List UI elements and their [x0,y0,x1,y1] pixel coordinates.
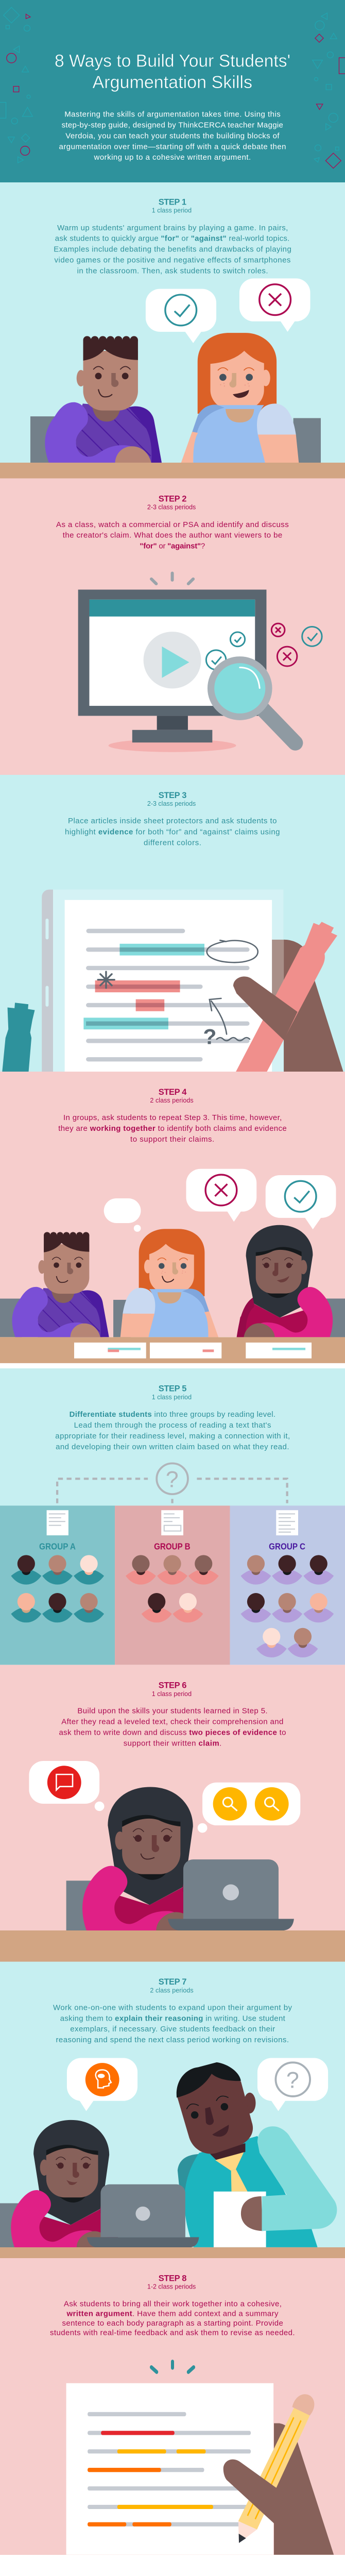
step 5 text [55,1410,290,1451]
speech bubble: cross [186,1169,256,1222]
illustration: student at laptop [29,1761,300,1930]
illustration: three students discussing [0,1169,345,1363]
step 8 text: written argument. Have them add context and a summary [66,2310,279,2318]
panel: step 6 [0,1665,345,1962]
desk [0,1930,345,1962]
step 8 text: Ask students to bring all their work together into a cohesive, [64,2300,282,2309]
teacher [177,2062,337,2247]
step 8 text [50,2300,295,2337]
step 5 duration: 1 class period [152,1394,192,1401]
step 1 text: in the classroom. Then, ask students to switch roles. [77,266,268,275]
step 6 text [59,1706,286,1748]
step 4 text [58,1113,287,1144]
panel: step 4 [0,1072,345,1363]
step 1 text: Warm up students' argument brains by playing a game. In pairs, [57,224,288,232]
illustration: highlighted article in sheet protector: ? [203,1025,216,1048]
step 4 heading: STEP 4 [159,1088,187,1097]
group C panel [230,1505,345,1665]
step 3 text: different colors. [144,838,201,847]
desk with papers [0,1337,345,1363]
step 3 text: highlight evidence for both “for” and “against” claims using [65,827,280,836]
step 6 heading: STEP 6 [159,1681,186,1690]
illustration: teacher and student [0,2058,337,2248]
step 1 heading: STEP 1 [159,198,186,207]
step 7 text: asking them to explain their reasoning in writing. Use student [60,2014,286,2023]
step 7 text: reasoning and spend the next class period working on revisions. [56,2036,289,2044]
question mark with dashed connectors: ? [166,1467,179,1493]
student: boy [30,336,162,463]
step 6 text: After they read a leveled text, check their comprehension and [61,1718,283,1726]
panel: step 1 [0,182,345,478]
panel: step 7 [0,1962,345,2259]
title: 8 Ways to Build Your Students' [55,52,290,71]
step 5 text: appropriate for their readiness level, making a connection with it, [55,1432,290,1440]
illustration: monitor with magnifier [78,573,322,752]
speech bubble: cross [239,278,310,332]
intro text [59,110,286,162]
step 5 heading: STEP 5 [159,1384,186,1394]
thought bubble: claim icon [29,1761,105,1811]
speech bubble: reasoning icon [67,2058,137,2111]
step 1 text: video games or the positive and negative effects of smartphones [55,256,290,265]
step 1 duration: 1 class period [152,207,192,214]
laptop [87,2184,199,2248]
thought bubble: evidence icons [198,1783,300,1833]
desk [0,2247,345,2259]
student in hijab [0,2120,120,2248]
panel: step 2 [0,478,345,775]
student in hijab [66,1787,205,1930]
group B panel: GROUP B [154,1541,191,1551]
step 2 duration: 2-3 class periods [147,503,196,511]
step 7 text [53,2003,292,2044]
step 6 duration: 1 class period [152,1690,192,1698]
group B panel [115,1505,230,1665]
step 4 text: to support their claims. [130,1135,214,1144]
panel: header [0,0,345,182]
step 5 text: and developing their own written claim based on what they read. [56,1443,289,1451]
thought bubble [104,1198,141,1232]
student: girl in hijab [237,1225,345,1337]
step 2 heading: STEP 2 [159,495,186,504]
step 7 heading: STEP 7 [159,1977,186,1987]
step 4 duration: 2 class periods [150,1097,194,1104]
step 3 text [65,817,280,847]
intro text: argumentation over time—starting off with a quick debate then [59,143,286,151]
speech bubble: question: ? [286,2068,299,2093]
step 2 text [56,520,289,550]
diagram: three reading groups [0,1463,345,1665]
step 4 text: In groups, ask students to repeat Step 3. This time, however, [63,1113,282,1122]
student: girl [113,1229,218,1337]
step 8 heading: STEP 8 [159,2274,186,2283]
panel: step 8 [0,2258,345,2555]
step 2 text: As a class, watch a commercial or PSA and identify and discuss [56,520,289,529]
illustration: highlighted article in sheet protector [2,890,343,1072]
step 5 text: Differentiate students into three groups by reading level. [70,1410,275,1419]
intro text: working up to a cohesive written argument. [94,153,251,162]
question mark with dashed connectors [57,1463,287,1503]
step 1 text: ask students to quickly argue "for" or "against" real-world topics. [55,234,289,243]
group C panel: GROUP C [269,1541,305,1551]
speech bubble: question [257,2058,328,2111]
step 6 text: Build upon the skills your students learned in Step 5. [77,1706,268,1715]
speech bubble: check [266,1175,336,1229]
title: Argumentation Skills [93,73,252,92]
laptop [168,1859,294,1930]
panel: footer call to action [0,2555,345,2576]
step 1 text [54,224,291,275]
step 6 text: support their written claim. [124,1739,221,1748]
step 2 text: "for" or "against"? [140,542,205,550]
intro text: Mastering the skills of argumentation takes time. Using this [64,110,281,118]
panel: step 5 [0,1368,345,1665]
step 2 text: the creator's claim. What does the author want viewers to be [63,531,282,539]
step 7 text: exemplars, if necessary. Give students feedback on their [70,2025,275,2033]
step 3 text: Place articles inside sheet protectors and ask students to [68,817,277,825]
step 8 text: sentence to each body paragraph as a starting point. Provide [62,2319,283,2328]
step 7 text: Work one-on-one with students to expand upon their argument by [53,2003,292,2012]
group A panel: GROUP A [39,1541,76,1551]
desk [0,463,345,478]
title [55,52,290,92]
step 7 duration: 2 class periods [150,1987,194,1994]
intro text: step-by-step guide, designed by ThinkCERCA teacher Maggie [62,121,283,130]
step 3 heading: STEP 3 [159,791,186,800]
illustration: written argument with pencil [66,2362,334,2555]
step 1 text: Examples include debating the benefits and drawbacks of playing [54,245,291,254]
step 4 text: they are working together to identify both claims and evidence [58,1124,287,1133]
step 8 duration: 1-2 class periods [147,2283,196,2290]
step 8 text: students with real-time feedback and ask them to revise as needed. [50,2329,295,2337]
group A panel [0,1505,115,1665]
speech bubble: check [146,289,216,343]
step 6 text: ask them to write down and discuss two pieces of evidence to [59,1728,286,1737]
step 5 text: Lead them through the process of reading a text that's [74,1421,271,1430]
step 3 duration: 2-3 class periods [147,800,196,807]
student: girl [181,333,321,463]
intro text: Verdoia, you can teach your students the building blocks of [65,132,280,140]
panel: step 3 [0,775,345,1072]
student: boy [0,1232,109,1337]
